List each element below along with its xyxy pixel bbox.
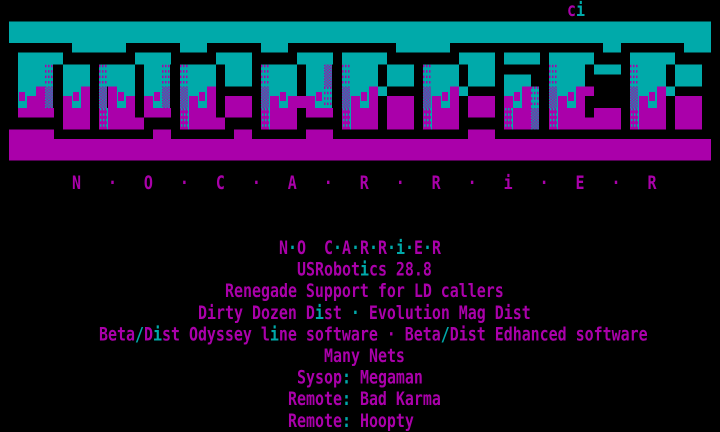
letter A (261, 52, 333, 129)
sysop line: Sysop: Megaman (297, 366, 423, 388)
letter R (630, 52, 702, 129)
remote line one: Remote: Bad Karma (288, 388, 441, 410)
letter O (99, 52, 171, 129)
logo top bar (9, 22, 711, 52)
support line: Renegade Support for LD callers (225, 280, 504, 302)
spaced board name: N · O · C · A · R · R · i · E · R (72, 171, 657, 193)
logo bottom bar (9, 130, 711, 161)
letter R (342, 52, 414, 129)
networks line: Many Nets (324, 344, 405, 366)
remote line two: Remote: Hoopty (288, 409, 414, 431)
letter N (18, 52, 90, 129)
letter i (504, 52, 540, 129)
board info text block (99, 236, 648, 431)
distribution line: Dirty Dozen Dist · Evolution Mag Dist (198, 301, 531, 323)
board name line: N·O C·A·R·R·i·E·R (279, 236, 442, 258)
letter E (549, 52, 621, 129)
letter R (423, 52, 495, 129)
software line: Beta/Dist Odyssey line software · Beta/Dist Edhanced software (99, 323, 648, 345)
modem line: USRobotics 28.8 (297, 258, 432, 280)
letter C (180, 52, 252, 129)
ANSI logo (9, 22, 711, 161)
